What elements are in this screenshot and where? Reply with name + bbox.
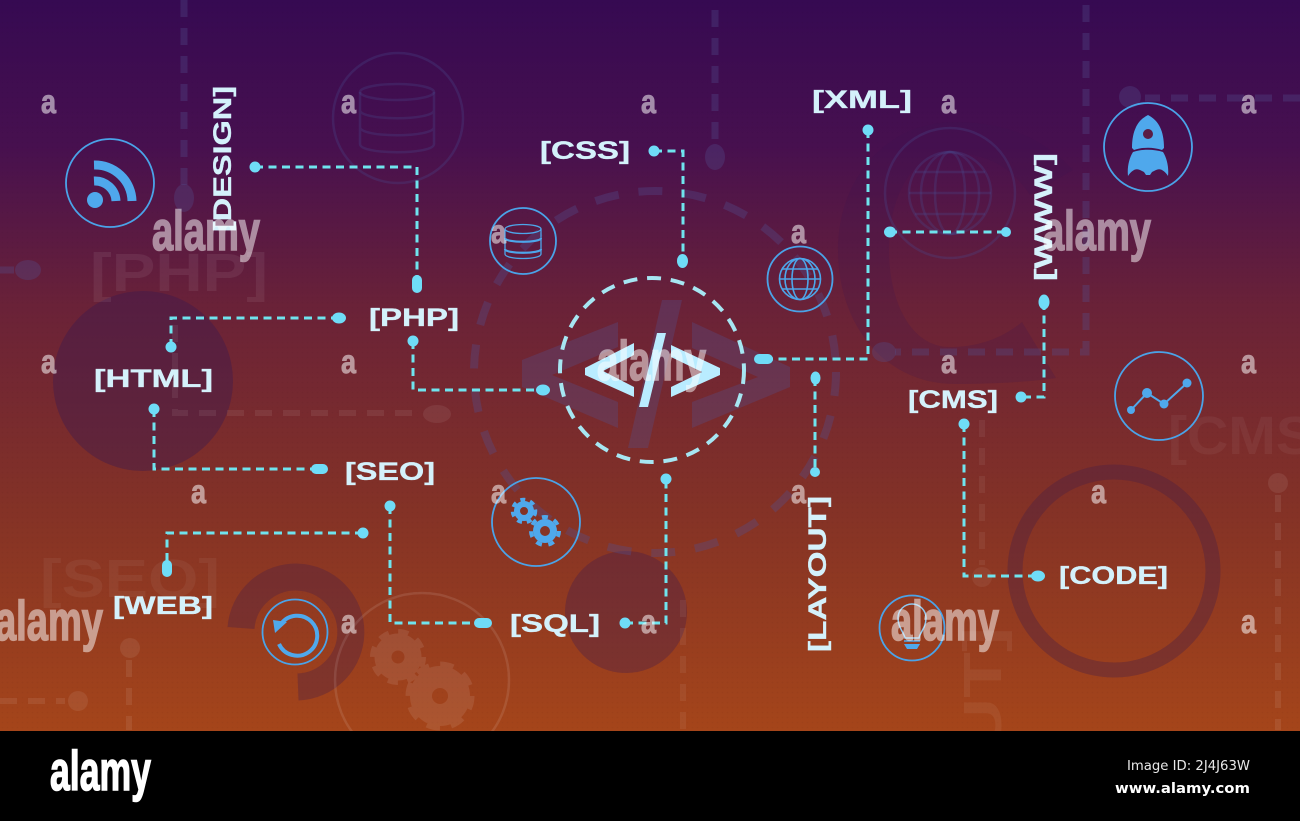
small watermark letters: a (1241, 83, 1257, 120)
small watermark letters: a (491, 473, 507, 510)
connector: globe link (884, 226, 1011, 238)
alamy logo: alamy (50, 739, 151, 802)
ghost large dashed ring (474, 191, 836, 553)
watermark words: alamy (1043, 199, 1151, 262)
small watermark letters: a (941, 343, 957, 380)
icon: gears (492, 478, 580, 566)
connector: WEB link (162, 528, 368, 577)
small watermark letters: a (641, 603, 657, 640)
watermark words: alamy (152, 199, 260, 262)
ghost disc behind HTML (53, 291, 233, 471)
small watermark letters: a (341, 83, 357, 120)
small watermark letters: a (491, 213, 507, 250)
connector: HTML to SEO (148, 404, 328, 474)
ghost gears icon (335, 593, 509, 767)
label PHP: [PHP] (369, 304, 459, 332)
small watermark letters: a (641, 83, 657, 120)
icon: RSS feed (66, 139, 154, 227)
ghost word LAYOUT fragment: UT] (953, 627, 1013, 752)
small watermark letters: a (1241, 343, 1257, 380)
connector: LAYOUT to centre (810, 372, 820, 477)
small watermark letters: a (341, 343, 357, 380)
connector: SEO to SQL (384, 500, 492, 628)
connector: SQL to centre (620, 474, 672, 628)
image ID: Image ID: 2J4J63W (1127, 758, 1250, 774)
icon: rocket (1104, 103, 1192, 191)
small watermark letters: a (41, 83, 57, 120)
label SQL: [SQL] (510, 610, 600, 638)
icon: light bulb (880, 596, 944, 660)
small watermark letters: a (1091, 473, 1107, 510)
connector: PHP to HTML (166, 312, 346, 352)
label CODE: [CODE] (1059, 562, 1168, 590)
connector: XML to centre (754, 124, 874, 364)
connector: CSS to centre (648, 146, 688, 268)
connector: PHP to centre (408, 336, 550, 396)
ghost C letter on the right (838, 122, 1073, 384)
watermark words: alamy (891, 589, 999, 652)
icon: database (490, 208, 556, 274)
small watermark letters: a (191, 473, 207, 510)
label WEB: [WEB] (113, 592, 213, 620)
ghost database icon (333, 53, 463, 183)
small watermark letters (41, 83, 1257, 640)
website: www.alamy.com (1115, 781, 1250, 797)
connector: DESIGN to PHP (250, 162, 422, 293)
bottom credit bar (0, 731, 1300, 821)
label CSS: [CSS] (540, 137, 630, 165)
ghost ring behind CODE (1015, 472, 1213, 670)
central hub: code symbol in dashed circle (560, 278, 744, 462)
icon: refresh (262, 600, 328, 664)
label LAYOUT vertical: [LAYOUT] (804, 496, 832, 652)
label SEO: [SEO] (345, 458, 435, 486)
watermark words (0, 199, 1151, 652)
ghost word PHP: [PHP] (90, 243, 268, 303)
ghost code symbol (522, 300, 790, 448)
ghost refresh arc (241, 577, 351, 687)
icon: line chart (1115, 352, 1203, 440)
label XML: [XML] (812, 86, 912, 114)
connector: WWW to CMS (1016, 294, 1050, 402)
small watermark letters: a (791, 213, 807, 250)
small watermark letters: a (41, 343, 57, 380)
icon: globe (768, 246, 832, 312)
label WWW vertical: [WWW] (1030, 153, 1058, 281)
small watermark letters: a (941, 83, 957, 120)
label HTML: [HTML] (94, 365, 213, 393)
code symbol (585, 333, 720, 407)
label DESIGN vertical: [DESIGN] (209, 86, 237, 232)
small watermark letters: a (791, 473, 807, 510)
ghost disc behind SQL (565, 551, 687, 673)
label CMS: [CMS] (908, 386, 998, 414)
ghost word SEO: [SEO] (40, 549, 220, 609)
small watermark letters: a (1241, 603, 1257, 640)
small watermark letters: a (341, 603, 357, 640)
dashed hub ring (560, 278, 744, 462)
watermark words: alamy (597, 329, 706, 392)
connector: CMS to CODE (958, 418, 1045, 582)
ghost globe icon (885, 128, 1015, 258)
